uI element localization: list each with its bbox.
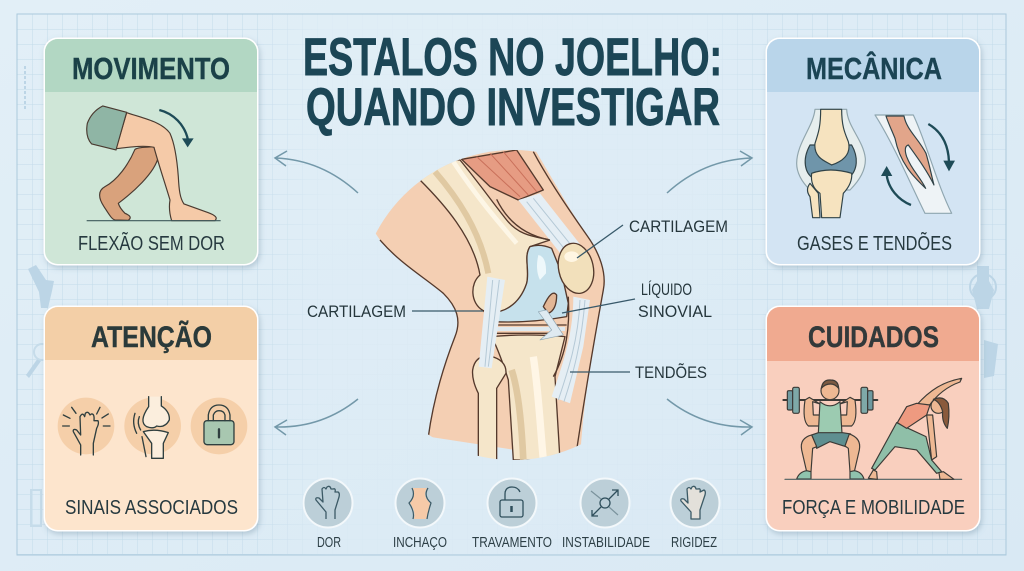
panel: cuidados	[766, 306, 980, 532]
arrow: to mecânica	[667, 151, 752, 193]
symptom icon: instabilidade	[562, 478, 650, 551]
symptom icon: dor	[304, 478, 352, 551]
callout: líquido sinovial: SINOVIAL	[638, 302, 712, 321]
icon: bent leg	[87, 106, 221, 221]
panel: movimento	[44, 38, 258, 266]
knee illustration	[373, 147, 605, 460]
callout: tendões	[570, 363, 707, 382]
callout: líquido sinovial: LÍQUIDO	[641, 280, 692, 299]
icon: joint and tendon	[797, 109, 955, 218]
heading: atenção: ATENÇÃO	[91, 320, 212, 354]
symptom icon: rigidez	[670, 478, 720, 551]
title	[303, 28, 722, 137]
symptom icon: dor: DOR	[317, 535, 341, 551]
caption: flexão sem dor: FLEXÃO SEM DOR	[78, 231, 225, 255]
heading: mecânica: MECÂNICA	[806, 50, 942, 86]
symptom icon: travamento: TRAVAMENTO	[472, 535, 552, 551]
arrow: to cuidados	[667, 399, 752, 435]
callout: cartilagem left: CARTILAGEM	[307, 302, 406, 321]
arrow: to movimento	[275, 151, 358, 193]
caption: sinais associados: SINAIS ASSOCIADOS	[65, 497, 238, 519]
symptom icon: instabilidade: INSTABILIDADE	[562, 535, 650, 551]
arrow: to atenção	[275, 399, 358, 435]
background icons	[25, 66, 998, 526]
title: ESTALOS NO JOELHO:	[303, 28, 722, 87]
symptom icon: inchaço: INCHAÇO	[393, 535, 447, 551]
heading: movimento: MOVIMENTO	[72, 51, 230, 86]
symptom icon: rigidez: RIGIDEZ	[671, 535, 717, 551]
heading: cuidados: CUIDADOS	[808, 321, 939, 354]
title: QUANDO INVESTIGAR	[306, 78, 720, 137]
symptom icon: inchaço	[393, 478, 447, 551]
callout: cartilagem right: CARTILAGEM	[629, 217, 728, 236]
icon: squat and stretch	[783, 378, 962, 479]
callout: líquido sinovial	[562, 280, 712, 321]
symptom icon: travamento	[472, 478, 552, 551]
callout: tendões: TENDÕES	[635, 363, 707, 382]
caption: gases e tendões: GASES E TENDÕES	[797, 231, 952, 255]
callout: cartilagem right	[577, 217, 728, 258]
caption: força e mobilidade: FORÇA E MOBILIDADE	[782, 497, 965, 519]
panel: atenção	[44, 306, 258, 532]
panel: mecânica	[766, 38, 980, 266]
icons: warning signs	[58, 397, 247, 458]
